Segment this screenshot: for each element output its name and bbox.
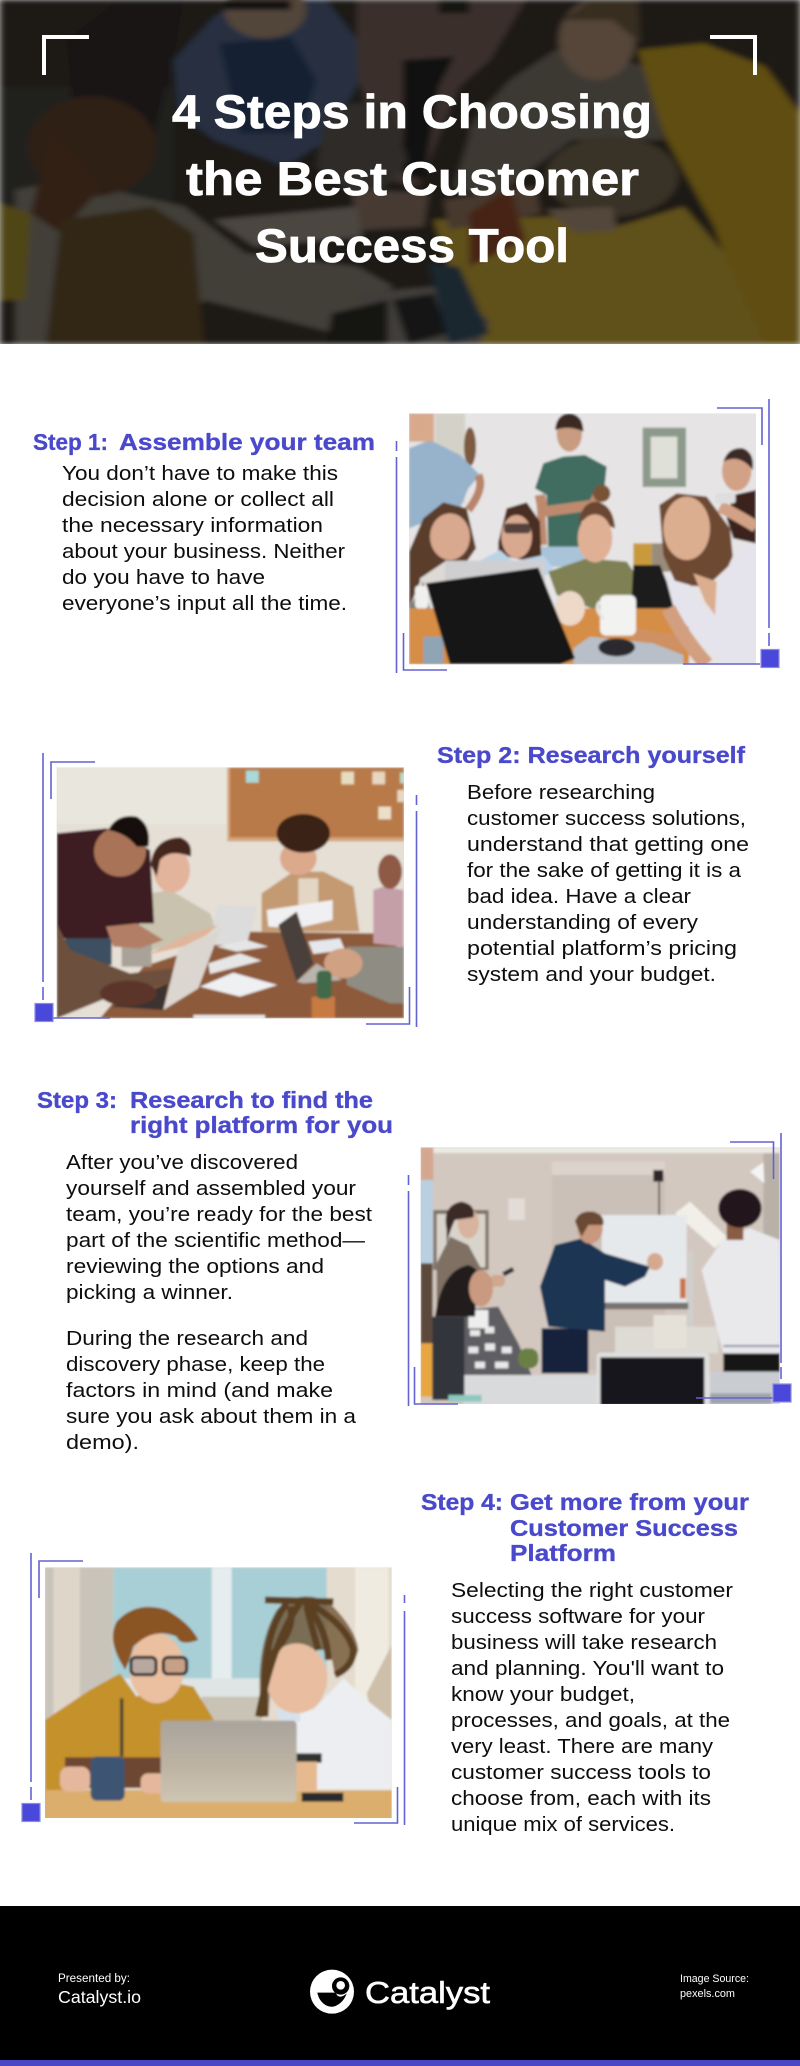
step 1 body text: about your business. Neither — [62, 541, 345, 563]
step 4 body text: know your budget, — [451, 1684, 635, 1706]
step 4 body text: processes, and goals, at the — [451, 1710, 730, 1732]
step 4 body text: very least. There are many — [451, 1736, 713, 1758]
title: Success Tool — [255, 219, 569, 272]
step 1 body text: everyone’s input all the time. — [62, 593, 347, 615]
step 4 body text: choose from, each with its — [451, 1788, 711, 1810]
image source — [680, 1973, 749, 2000]
step 3 body text: reviewing the options and — [66, 1256, 324, 1278]
panel: step 1 — [33, 395, 785, 680]
step 1 heading: Step 1: — [33, 429, 108, 455]
step 2 body text: for the sake of getting it is a — [467, 860, 742, 882]
step 2 heading: Step 2: Research yourself — [437, 742, 745, 768]
step 3 body text: During the research and — [66, 1328, 308, 1350]
presented by: Presented by: — [58, 1973, 130, 1985]
step 3 body text: sure you ask about them in a — [66, 1406, 357, 1428]
image source: Image Source: — [680, 1973, 749, 1985]
step 3 heading: right platform for you — [130, 1112, 393, 1138]
title: 4 Steps in Choosing — [172, 85, 652, 138]
footer accent bar — [0, 2060, 800, 2066]
step 3 image frame — [408, 1133, 781, 1406]
step 3 heading: Research to find the — [130, 1087, 373, 1113]
corner bracket: top right — [710, 37, 755, 75]
step 1 body text: the necessary information — [62, 515, 323, 537]
step 2 body text: potential platform’s pricing — [467, 938, 737, 960]
step 4 accent square — [22, 1804, 40, 1822]
header photo: team hands together, darkened — [0, 0, 800, 344]
step 2 body text: understand that getting one — [467, 834, 749, 856]
step 4 heading: Step 4: — [421, 1489, 503, 1515]
step 1 heading — [33, 429, 375, 455]
presented by — [58, 1973, 141, 2007]
step 3 body text: demo). — [66, 1432, 139, 1454]
step 4 body text: Selecting the right customer — [451, 1580, 733, 1602]
catalyst logo — [310, 1970, 490, 2014]
step 3 body text: discovery phase, keep the — [66, 1354, 325, 1376]
step 1 image frame — [396, 399, 769, 673]
step 3 heading: Step 3: — [37, 1087, 117, 1113]
step 2 accent square — [35, 1004, 53, 1022]
step 1 body text: do you have to have — [62, 567, 265, 589]
title — [172, 85, 652, 272]
step 4 heading: Customer Success — [510, 1515, 738, 1541]
step 4 body text: success software for your — [451, 1606, 705, 1628]
step 3 accent square — [773, 1384, 791, 1402]
step 4 image frame — [31, 1553, 404, 1825]
step 4 photo: two students at a laptop — [45, 1567, 392, 1818]
step 4 body text: customer success tools to — [451, 1762, 711, 1784]
step 2 body text: customer success solutions, — [467, 808, 746, 830]
panel: step 3 — [37, 1087, 795, 1454]
step 2 body text: understanding of every — [467, 912, 698, 934]
step 1 heading: Assemble your team — [119, 429, 375, 455]
step 3 body text: factors in mind (and make — [66, 1380, 333, 1402]
presented by: Catalyst.io — [58, 1987, 141, 2007]
step 2 body text — [467, 782, 749, 986]
logo wordmark: Catalyst — [365, 1975, 490, 2010]
step 1 photo: team around a laptop — [409, 413, 756, 664]
header banner — [0, 0, 800, 344]
step 4 heading: Platform — [510, 1540, 616, 1566]
panel: step 2 — [30, 742, 749, 1030]
step 2 body text: system and your budget. — [467, 964, 716, 986]
step 2 image frame — [43, 753, 416, 1027]
step 3 heading — [37, 1087, 393, 1138]
step 1 accent square — [761, 650, 779, 668]
step 3 photo: presenter at a whiteboard — [420, 1147, 780, 1404]
corner bracket: top left — [44, 37, 89, 75]
step 3 body text: part of the scientific method— — [66, 1230, 365, 1252]
step 2 body text: Before researching — [467, 782, 655, 804]
step 1 body text: You don’t have to make this — [62, 463, 338, 485]
step 1 body text — [62, 463, 347, 615]
step 4 body text: business will take research — [451, 1632, 717, 1654]
step 3 body text: After you’ve discovered — [66, 1152, 298, 1174]
image source: pexels.com — [680, 1988, 735, 2000]
footer background — [0, 1906, 800, 2060]
step 2 photo: colleagues at a table with laptops — [56, 767, 404, 1018]
step 3 body text: picking a winner. — [66, 1282, 233, 1304]
step 4 body text: and planning. You'll want to — [451, 1658, 724, 1680]
step 1 body text: decision alone or collect all — [62, 489, 334, 511]
logo mark — [310, 1970, 354, 2014]
step 3 body text — [66, 1152, 373, 1454]
footer — [0, 1906, 800, 2066]
step 3 body text: team, you’re ready for the best — [66, 1204, 373, 1226]
step 3 body text: yourself and assembled your — [66, 1178, 356, 1200]
title: the Best Customer — [186, 152, 639, 205]
step 2 body text: bad idea. Have a clear — [467, 886, 691, 908]
step 4 body text: unique mix of services. — [451, 1814, 675, 1836]
step 4 heading: Get more from your — [510, 1489, 749, 1515]
step 4 body text — [451, 1580, 733, 1836]
panel: step 4 — [20, 1489, 749, 1836]
step 4 heading — [421, 1489, 749, 1566]
